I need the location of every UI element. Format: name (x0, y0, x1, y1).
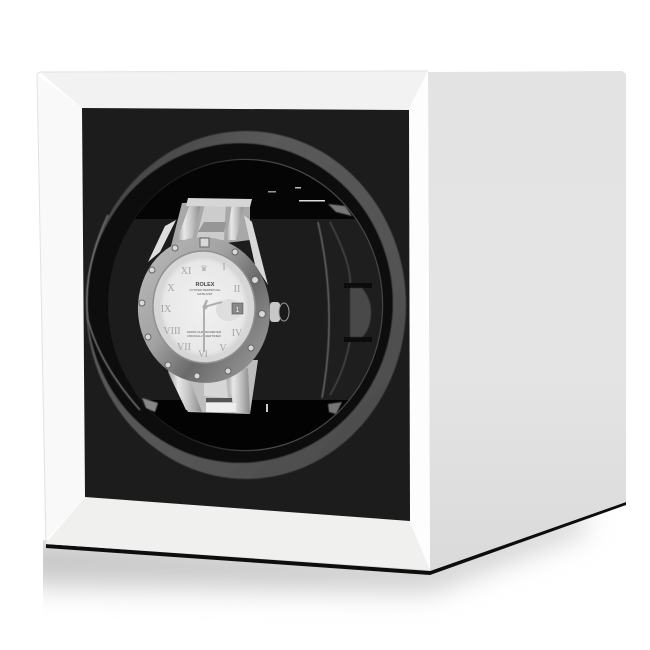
dial text: DATEJUST (197, 292, 213, 296)
roman numerals: VIII (163, 326, 181, 337)
glossy black bottom strap (142, 400, 348, 450)
roman numerals: XI (181, 266, 191, 277)
roman numerals: V (219, 343, 227, 354)
hands (203, 300, 222, 352)
left bevel (37, 75, 85, 541)
dial text (187, 282, 222, 338)
date window (216, 299, 243, 321)
dial text: ROLEX (196, 282, 215, 288)
right bevel (408, 71, 430, 571)
top bevel (40, 71, 428, 110)
crown (270, 302, 289, 322)
roman numerals: II (234, 284, 240, 295)
roman numerals: VI (198, 349, 208, 359)
wristwatch (131, 198, 289, 414)
black recess (82, 108, 410, 521)
winder box (37, 71, 626, 575)
inner bezel ring (147, 246, 261, 368)
roman numerals: I (222, 262, 226, 273)
front outline (37, 71, 428, 544)
winder ring and cradle (86, 131, 406, 479)
right cradle section (333, 219, 382, 400)
floor shadow (20, 510, 585, 590)
roman numerals: IV (232, 328, 243, 339)
date window: 1 (236, 307, 240, 314)
inner thin ring (108, 160, 382, 450)
clasp (344, 283, 372, 288)
cushion (108, 219, 333, 400)
front frame (37, 71, 430, 571)
bezel (131, 231, 277, 389)
glossy black top strap (135, 160, 356, 219)
dial (155, 253, 253, 361)
dial text: OYSTER PERPETUAL (189, 288, 221, 292)
roman numerals (161, 262, 243, 359)
dial text: OFFICIALLY CERTIFIED (187, 334, 222, 338)
roman numerals: IX (161, 304, 172, 315)
upper bracelet (148, 198, 268, 285)
lower bracelet (163, 360, 258, 414)
dial text: SWISS CHRONOMETER (187, 330, 222, 334)
outer ring (86, 131, 406, 479)
ring clips (328, 204, 352, 216)
roman numerals: VII (177, 342, 191, 353)
roman numerals: X (167, 283, 175, 294)
illustration: white single watch winder with watch (36, 70, 626, 604)
crown logo: ♛ (200, 264, 208, 273)
right side face (428, 71, 626, 571)
black base line (46, 502, 626, 575)
strap glints (299, 200, 325, 202)
bottom bevel (45, 497, 430, 570)
left ring highlight (87, 215, 140, 410)
bezel diamonds (139, 238, 266, 379)
